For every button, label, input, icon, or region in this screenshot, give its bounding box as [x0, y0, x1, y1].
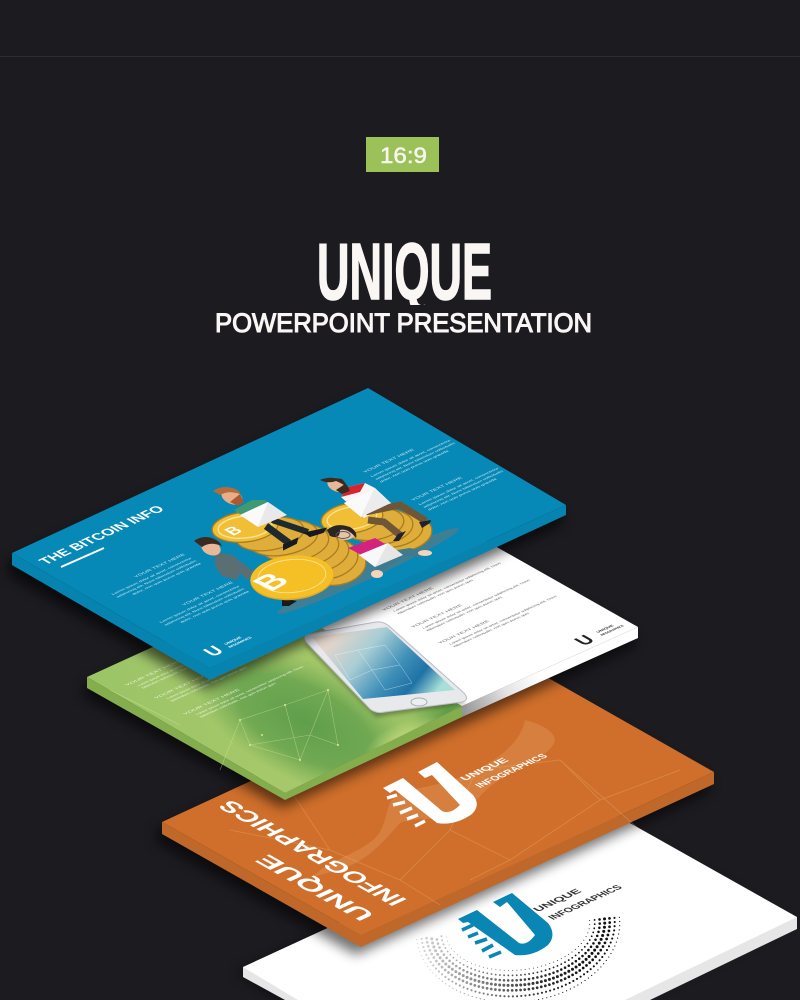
white slide text: Lorem ipsum dolor sit amet, consectetur adipiscing elit. Nunc	[392, 562, 503, 612]
big bitcoin coin	[243, 552, 336, 604]
green text: YOUR TEXT HERE	[152, 672, 213, 699]
text block 1: dolor, non quis purus quis gravida	[131, 562, 202, 596]
green half	[87, 596, 462, 800]
text block 4	[409, 462, 510, 511]
text block 1: Lorem ipsum dolor sit amet, consectetur	[110, 556, 194, 596]
text block 3: adipiscing elit. Nunc bibendum sollicitudin	[374, 442, 457, 480]
logo text: UNIQUE	[531, 888, 585, 914]
text block 2: adipiscing elit. Nunc bibendum sollicitudin	[163, 587, 246, 626]
badge: 16:9	[366, 137, 439, 172]
phone	[304, 622, 467, 717]
green text: bibendum sollicitudin, non quis purus quis	[199, 682, 277, 718]
text block 4: adipiscing elit. Nunc bibendum sollicitudin	[422, 470, 505, 508]
wave pattern	[230, 720, 680, 905]
coin stack right	[319, 499, 434, 555]
coin stack left	[211, 509, 369, 590]
illustration: bitcoin team	[194, 475, 462, 621]
green text	[123, 636, 309, 721]
icon: white U logo	[383, 762, 477, 826]
person: grey shirt	[194, 537, 297, 606]
small logo: U	[569, 632, 599, 648]
green text: YOUR TEXT HERE	[123, 659, 184, 686]
ground shadow	[274, 521, 462, 621]
logo text: INFOGRAPHICS	[546, 884, 626, 922]
white slide text: YOUR TEXT HERE	[436, 619, 491, 644]
subtitle: POWERPOINT PRESENTATION: POWERPOINT PRESENTATION	[215, 308, 592, 338]
small logo: UNIQUE	[223, 636, 244, 646]
small logo: INFOGRAPHICS	[599, 624, 625, 636]
white slide text: YOUR TEXT HERE	[380, 586, 435, 611]
text block 3: dolor, non quis purus quis gravida	[379, 450, 450, 483]
white slide text: Lorem ipsum dolor sit amet, consectetur adipiscing elit. Nunc	[421, 579, 532, 629]
text block 4: YOUR TEXT HERE	[409, 476, 464, 502]
text block 2: Lorem ipsum dolor sit amet, consectetur	[158, 584, 242, 624]
white slide text: bibendum sollicitudin, non quis purus quis	[396, 579, 475, 615]
title: UNIQUE INFOGRAPHICS upside down: UNIQUE	[249, 851, 381, 924]
white slide text: bibendum sollicitudin, non quis purus quis	[425, 596, 504, 632]
panel: phone slide	[84, 516, 638, 808]
text block 1: YOUR TEXT HERE	[132, 552, 187, 578]
icon: blue U logo	[458, 893, 552, 957]
screen constellation	[335, 645, 412, 690]
small logo: INFOGRAPHICS	[227, 636, 253, 649]
text block 2: dolor, non quis purus quis gravida	[179, 590, 250, 624]
coin B: stack: B	[221, 524, 247, 538]
text block 3: YOUR TEXT HERE	[361, 448, 416, 474]
small logo	[569, 624, 625, 648]
green text: YOUR TEXT HERE	[181, 688, 242, 715]
person: red shirt	[320, 475, 431, 541]
small logo: UNIQUE	[595, 624, 616, 633]
text block 4: Lorem ipsum dolor sit amet, consectetur	[417, 466, 501, 506]
badge: 16:9: 16:9	[380, 143, 427, 168]
green text: bibendum sollicitudin, non quis purus quis	[170, 666, 248, 702]
text block 3	[361, 434, 462, 483]
green text: Lorem ipsum dolor sit amet, consectetur adipiscing elit. Nunc	[136, 639, 240, 687]
panel: blue bitcoin slide	[8, 388, 566, 689]
title: UNIQUE INFOGRAPHICS upside down: INFOGRAPHICS	[212, 797, 413, 909]
panel: orange logo slide	[157, 659, 714, 955]
small logo	[198, 636, 253, 659]
logo text: INFOGRAPHICS	[473, 753, 551, 790]
text block 2	[151, 580, 251, 629]
white slide text: YOUR TEXT HERE	[409, 603, 464, 628]
text block 4: dolor, non quis purus quis gravida	[427, 478, 498, 511]
green text: Lorem ipsum dolor sit amet, consectetur adipiscing elit. Nunc	[165, 649, 276, 700]
green text: Lorem ipsum dolor sit amet, consectetur adipiscing elit. Nunc	[194, 665, 305, 716]
halftone arc	[417, 917, 627, 1000]
white slide text: bibendum sollicitudin, non quis purus quis	[452, 612, 531, 648]
text block 2: YOUR TEXT HERE	[180, 580, 235, 606]
heading: THE BITCOIN INFO: THE BITCOIN INFO	[35, 503, 168, 567]
small logo: U	[198, 643, 228, 659]
big bitcoin coin: B	[244, 568, 298, 595]
text block 1: adipiscing elit. Nunc bibendum sollicitudin	[115, 559, 198, 598]
person: pink top	[327, 525, 432, 578]
text block 1	[103, 552, 203, 601]
person: green shirt	[213, 486, 325, 549]
white slide text	[380, 558, 563, 650]
white slide text: Lorem ipsum dolor sit amet, consectetur adipiscing elit. Nunc	[448, 595, 559, 645]
logo text: UNIQUE	[458, 757, 512, 783]
panel: white logo slide	[237, 804, 797, 1000]
white half	[264, 516, 638, 717]
title: UNIQUE: UNIQUE	[317, 227, 492, 316]
green text: bibendum sollicitudin, non quis purus quis	[141, 655, 216, 689]
text block 3: Lorem ipsum dolor sit amet, consectetur	[369, 438, 453, 478]
